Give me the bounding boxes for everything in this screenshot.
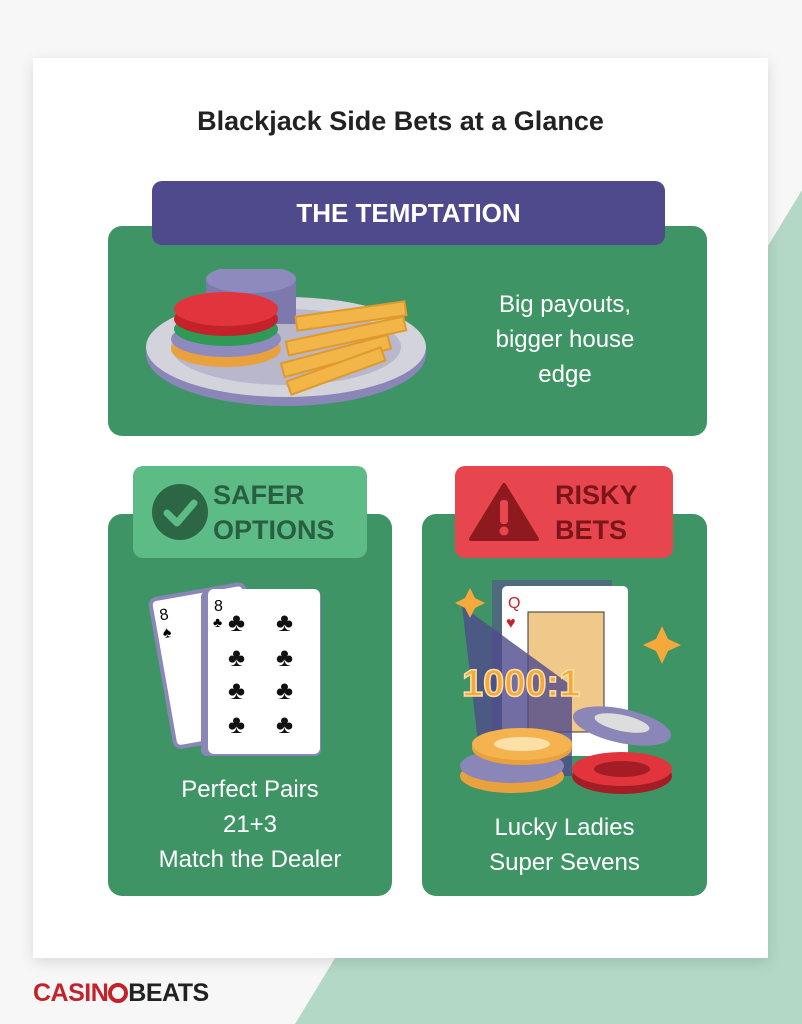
header: risky bets: BETS: [555, 515, 627, 545]
title: Blackjack Side Bets at a Glance: [197, 106, 604, 136]
header: risky bets: [455, 466, 673, 558]
icon: pair of eights: ♣: [228, 675, 245, 705]
header: the temptation: [152, 181, 665, 245]
text: safer bets list: Perfect Pairs: [181, 776, 319, 803]
icon: pair of eights: ♣: [228, 709, 245, 739]
icon: pair of eights: 8: [214, 598, 223, 615]
icon: pair of eights: ♣: [276, 642, 293, 672]
text: big payouts: bigger house: [496, 326, 634, 353]
text: big payouts: [496, 291, 634, 388]
icon: pair of eights: ♣: [228, 642, 245, 672]
icon: warning: [469, 482, 539, 541]
green box: [422, 514, 707, 896]
panel: risky bets: [422, 466, 707, 896]
text: risky bets list: [489, 814, 640, 876]
text: safer bets list: Match the Dealer: [159, 846, 341, 873]
panel: safer options: [108, 466, 392, 896]
text: safer bets list: [159, 776, 341, 873]
icon: pair of eights: [148, 582, 321, 756]
green box: [108, 226, 707, 436]
icon: pair of eights: ♣: [276, 607, 293, 637]
icon: queen, 1000:1 and chips: Q: [508, 595, 520, 612]
text: risky bets list: Super Sevens: [489, 849, 640, 876]
icon: queen, 1000:1 and chips: 1000:1: [462, 663, 580, 705]
text: big payouts: Big payouts,: [499, 291, 631, 318]
text: big payouts: edge: [538, 361, 592, 388]
header: the temptation: THE TEMPTATION: [296, 198, 521, 228]
header: safer options: [133, 466, 367, 558]
icon: plate of chips and fries: [146, 269, 426, 406]
header: risky bets: RISKY: [555, 480, 638, 510]
icon: pair of eights: ♣: [276, 709, 293, 739]
green box: [108, 514, 392, 896]
text: risky bets list: Lucky Ladies: [494, 814, 635, 841]
header: safer options: OPTIONS: [213, 515, 335, 545]
icon: pair of eights: ♠: [161, 624, 173, 642]
logo: casinobeats: CASIN BEATS: [33, 979, 209, 1007]
icon: pair of eights: ♣: [276, 675, 293, 705]
icon: checkmark: [152, 484, 208, 540]
icon: pair of eights: ♣: [213, 614, 222, 630]
icon: pair of eights: 8: [158, 606, 170, 624]
icon: queen, 1000:1 and chips: [455, 580, 681, 794]
icon: pair of eights: ♣: [228, 607, 245, 637]
text: safer bets list: 21+3: [223, 811, 277, 838]
panel: temptation: [108, 181, 707, 436]
icon: queen, 1000:1 and chips: ♥: [506, 615, 516, 632]
header: safer options: SAFER: [213, 480, 305, 510]
